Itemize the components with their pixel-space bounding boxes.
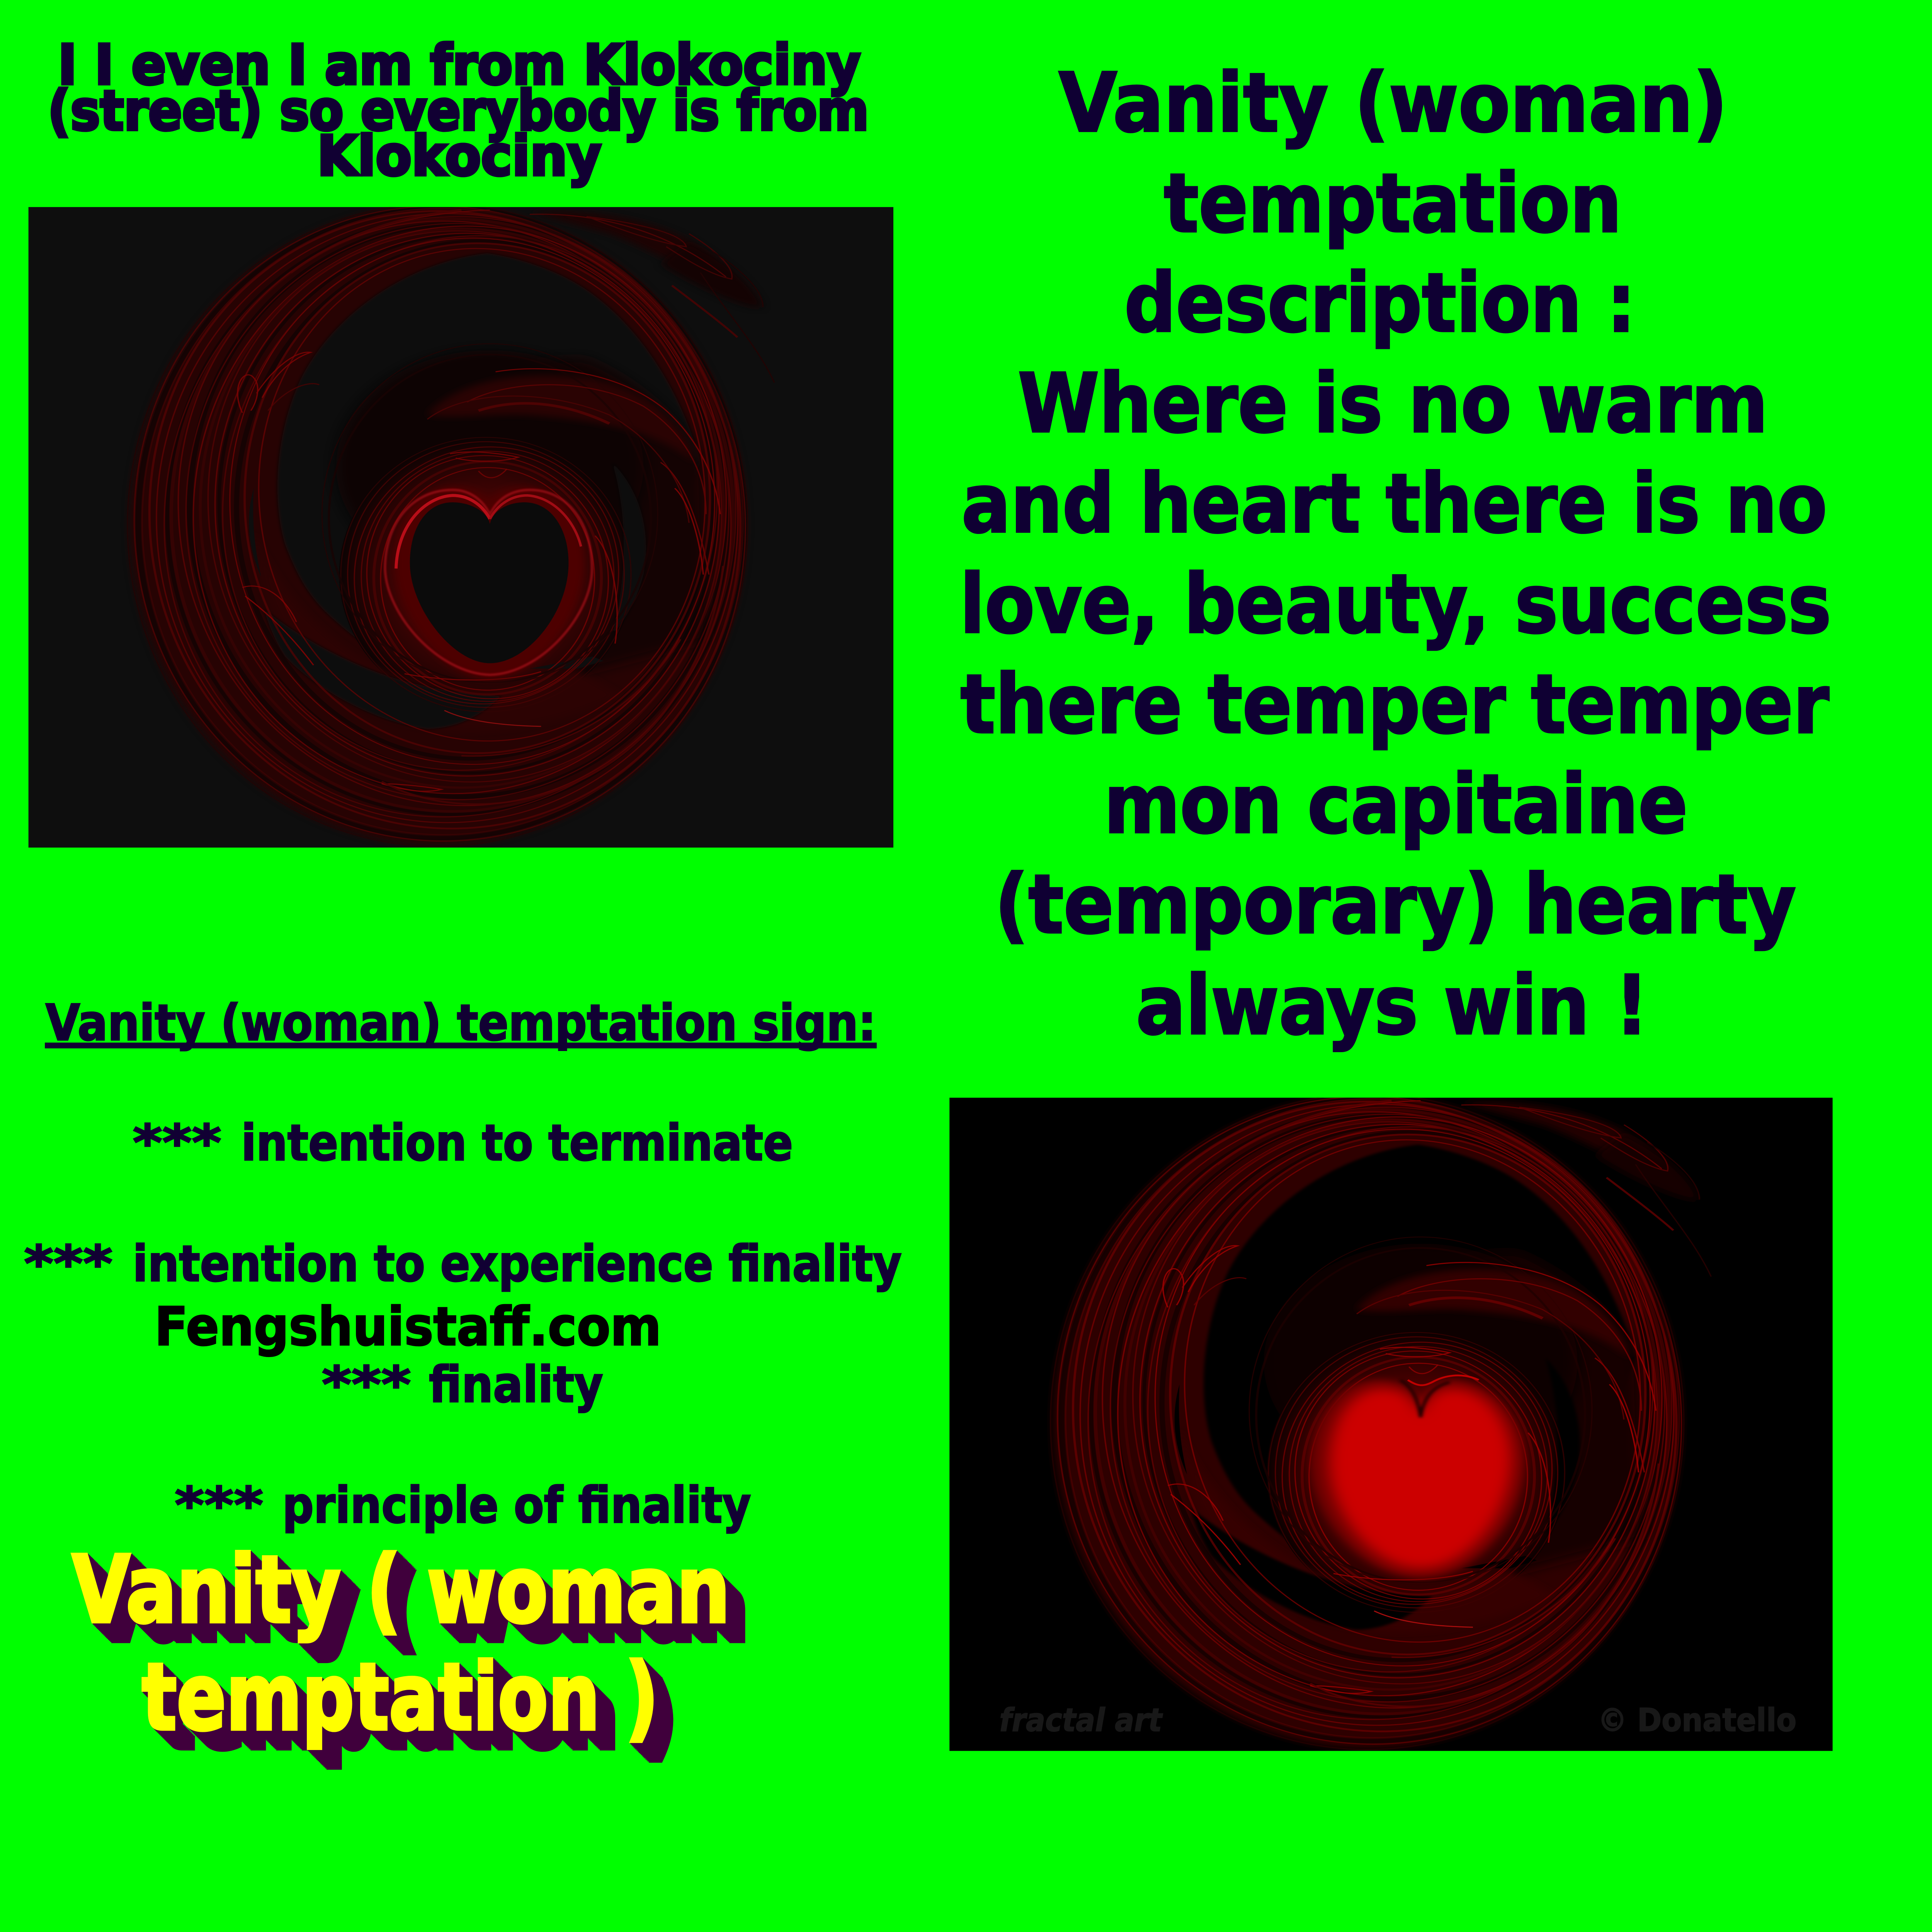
panel: fractal image with red heart bbox=[949, 1093, 1833, 1751]
yellow extruded title bbox=[72, 1536, 730, 1751]
heart outline bbox=[385, 490, 592, 675]
description text: (temporary) hearty bbox=[995, 857, 1796, 952]
description text: and heart there is no bbox=[962, 456, 1827, 551]
description text: Vanity (woman) bbox=[1059, 55, 1728, 150]
list: temptation signs: *** bbox=[175, 1477, 263, 1534]
list: temptation signs: finality bbox=[429, 1356, 603, 1414]
description text: temptation bbox=[1164, 156, 1622, 251]
description text: Where is no warm bbox=[1018, 356, 1768, 451]
fractal swirl bbox=[127, 202, 774, 846]
heading: Klokociny street: I I even I am from Klokociny bbox=[58, 33, 861, 97]
fractal swirl bbox=[1050, 1093, 1711, 1750]
list: temptation signs: principle of finality bbox=[282, 1477, 751, 1534]
list heading: temptation sign: Vanity (woman) temptation sign: bbox=[46, 994, 876, 1052]
heading: Klokociny street: Klokociny bbox=[317, 124, 601, 188]
list: temptation signs: *** bbox=[322, 1356, 411, 1414]
list: temptation signs: *** bbox=[133, 1114, 221, 1172]
red heart bbox=[1310, 1376, 1525, 1578]
description text: always win ! bbox=[1136, 958, 1648, 1053]
watermark: copyright: © Donatello bbox=[1598, 1702, 1796, 1739]
website name: Fengshuistaff.com bbox=[155, 1296, 661, 1358]
watermark: fractal art: fractal art bbox=[999, 1702, 1163, 1739]
panel: fractal image with dark heart bbox=[29, 202, 893, 848]
yellow extruded title: Vanity ( woman bbox=[72, 1536, 730, 1644]
list: temptation signs: *** bbox=[24, 1235, 112, 1293]
description text bbox=[960, 55, 1831, 1053]
description text: description : bbox=[1124, 255, 1636, 350]
description text: mon capitaine bbox=[1104, 757, 1688, 852]
description text: love, beauty, success bbox=[960, 556, 1831, 651]
description text: there temper temper bbox=[961, 657, 1829, 752]
heading: Klokociny street bbox=[48, 33, 869, 188]
yellow extruded title: temptation ) bbox=[142, 1644, 658, 1751]
heading: Klokociny street: (street) so everybody is from bbox=[48, 79, 869, 143]
list: temptation signs: intention to experience finality bbox=[133, 1235, 902, 1293]
list: temptation signs: intention to terminate bbox=[241, 1114, 793, 1172]
list: temptation signs bbox=[24, 1114, 902, 1534]
